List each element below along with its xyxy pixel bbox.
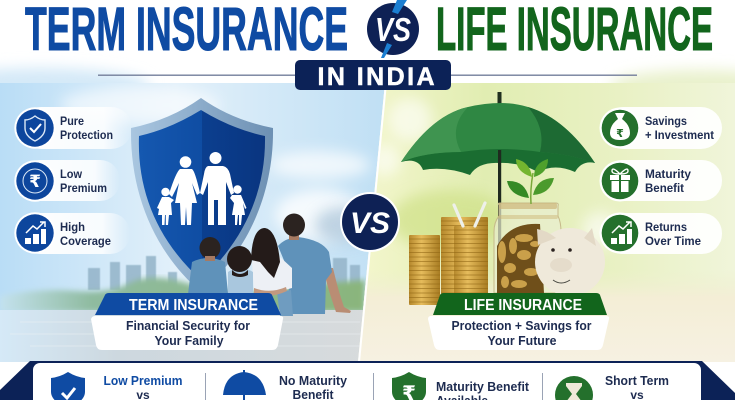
item: short term: Short Term <box>605 374 669 388</box>
shield with family icon <box>131 98 273 292</box>
feature: savings and investment <box>600 107 722 149</box>
illustration: glass jar with coins <box>494 203 561 293</box>
comparison bar <box>0 361 735 400</box>
pills: term insurance features <box>14 107 132 254</box>
man <box>326 268 351 313</box>
panel: life insurance background <box>350 83 735 363</box>
label: term insurance <box>91 293 283 350</box>
feature: savings and investment: + Investment <box>645 128 714 142</box>
feature: maturity benefit <box>600 160 722 202</box>
item: low premium <box>51 372 182 400</box>
label: term insurance: Financial Security for <box>126 319 250 333</box>
illustration: coin stacks <box>409 203 488 305</box>
subtitle badge: in india: IN INDIA <box>318 63 434 91</box>
icon: family silhouette <box>157 152 246 225</box>
feature: savings and investment: Savings <box>645 114 687 128</box>
item: no maturity benefit: No Maturity <box>279 374 347 388</box>
girl <box>228 268 253 294</box>
feature: returns over time <box>600 212 722 254</box>
label: life insurance: Your Future <box>488 334 557 348</box>
badge: vs header: VS <box>375 11 411 48</box>
feature: low premium: Low <box>60 167 83 181</box>
label: term insurance: Your Family <box>154 334 224 348</box>
deck <box>0 310 390 363</box>
item: low premium: Low Premium <box>104 374 182 388</box>
item: maturity benefit available: Maturity Benefit <box>436 380 530 394</box>
woman <box>277 290 293 316</box>
item: maturity benefit available <box>392 372 530 400</box>
illustration: piggy bank <box>535 228 605 296</box>
rule right of subtitle <box>450 74 637 76</box>
label: life insurance: LIFE INSURANCE <box>464 297 582 314</box>
treeline <box>0 278 365 312</box>
feature: pure protection: Pure <box>60 114 84 128</box>
feature: high coverage: Coverage <box>60 234 111 248</box>
feature: pure protection <box>14 107 132 149</box>
feature: returns over time: Over Time <box>645 234 701 248</box>
feature: pure protection: Protection <box>60 128 113 142</box>
feature: low premium: ₹ <box>29 172 41 192</box>
label: term insurance: TERM INSURANCE <box>129 297 258 314</box>
header tint left <box>0 68 150 104</box>
feature: maturity benefit: Maturity <box>645 167 691 181</box>
badge: vs header <box>367 0 419 58</box>
central vs badge: VS <box>350 207 390 240</box>
boy <box>188 258 228 294</box>
illustration: plant sprout <box>507 159 554 204</box>
pills: life insurance features <box>600 107 722 254</box>
feature: low premium: Premium <box>60 181 107 195</box>
family seated <box>188 214 351 316</box>
feature: savings and investment: ₹ <box>616 127 624 140</box>
label: life insurance: Protection + Savings for <box>452 319 592 333</box>
panel: term insurance background <box>0 83 390 363</box>
feature: returns over time: Returns <box>645 220 687 234</box>
feature: high coverage: High <box>60 220 85 234</box>
illustration: umbrella <box>401 92 595 275</box>
divider between panels <box>358 83 387 362</box>
rule left of subtitle <box>98 74 296 76</box>
feature: low premium <box>14 160 120 202</box>
feature: maturity benefit: Benefit <box>645 181 684 195</box>
city skyline <box>88 256 360 290</box>
subtitle badge: in india <box>295 60 451 91</box>
feature: high coverage <box>14 212 130 254</box>
item: no maturity benefit <box>223 370 347 400</box>
central vs badge <box>340 192 400 252</box>
item: short term <box>555 374 669 400</box>
header tint right <box>610 70 735 102</box>
label: life insurance <box>428 293 609 350</box>
